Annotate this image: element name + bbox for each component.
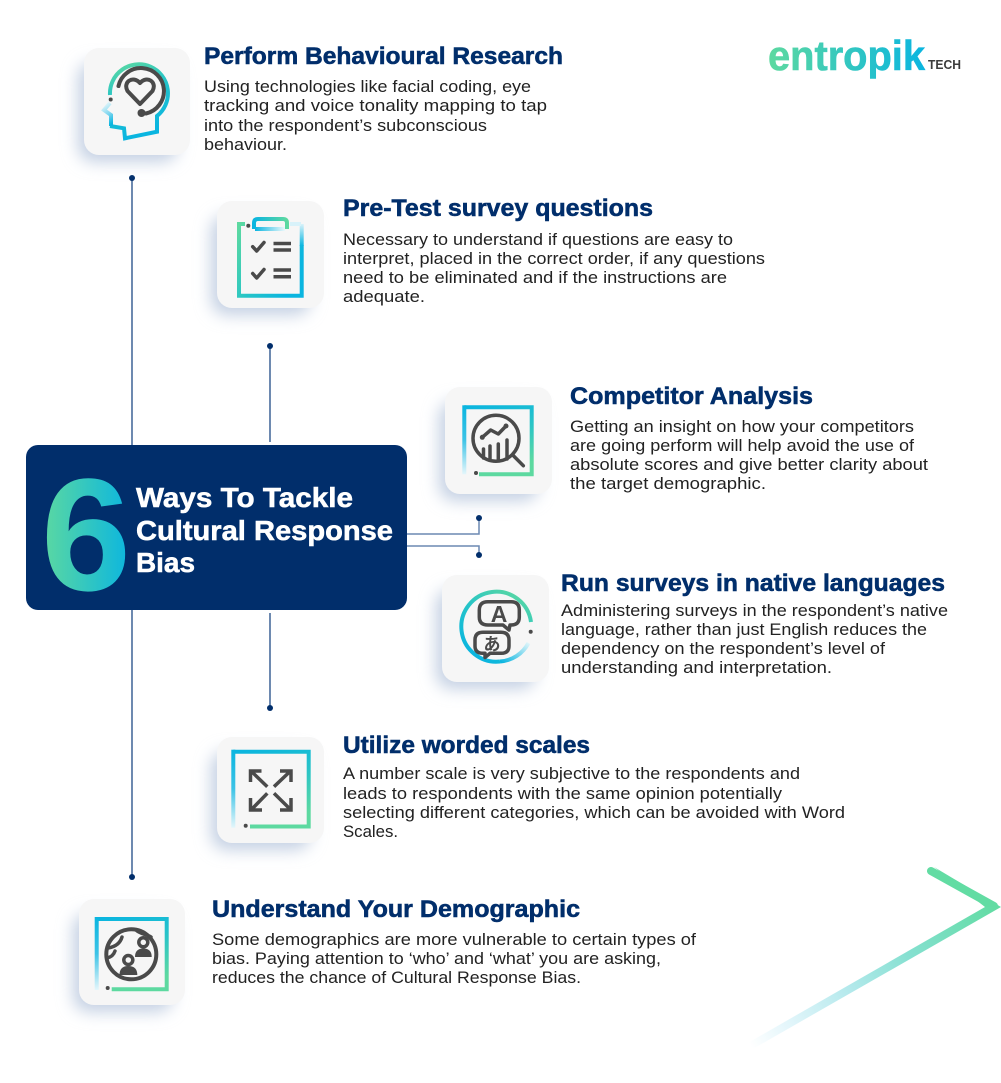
card [211,201,324,315]
icon: head with heart [104,64,168,138]
description: the target demographic. [570,475,766,493]
card [439,387,552,501]
heading: Run surveys in native languages [561,570,945,597]
heading: Understand Your Demographic [212,896,580,923]
panel: understand your demographic [73,896,696,1012]
description: Getting an insight on how your competitors [570,418,914,436]
heading: Perform Behavioural Research [204,43,563,70]
description: bias. Paying attention to ‘who’ and ‘what’ you are asking, [212,950,661,968]
description [570,418,928,493]
panel: run surveys in native languages [436,570,948,689]
description: selecting different categories, which can be avoided with Word [343,804,845,822]
panel: pre-test survey questions [211,195,765,315]
heading: Utilize worded scales [343,732,590,759]
description: reduces the chance of Cultural Response Bias. [212,969,581,987]
description: language, rather than just English reduces the [561,621,927,639]
title: Ways To Tackle [136,482,353,513]
decorative chevron arrow [746,867,1001,1050]
card [211,737,324,850]
panel: utilize worded scales [211,732,845,850]
icon: language speech bubbles [461,592,533,662]
heading: Pre-Test survey questions [343,195,653,222]
description: A number scale is very subjective to the respondents and [343,765,800,783]
description: leads to respondents with the same opinion potentially [343,785,783,803]
description: into the respondent’s subconscious [204,117,487,135]
description: Scales. [343,823,398,841]
description [204,78,547,154]
panel: perform behavioural research [78,43,563,162]
description: are going perform will help avoid the use of [570,437,914,455]
description: Some demographics are more vulnerable to certain types of [212,931,696,949]
title [136,482,393,578]
description: behaviour. [204,136,287,154]
icon: expanding arrows [231,750,309,828]
description: tracking and voice tonality mapping to tap [204,97,547,115]
description: adequate. [343,288,425,306]
logo: entropik tech: entropik [768,32,926,79]
description: understanding and interpretation. [561,659,832,677]
connector lines [129,175,482,880]
description: absolute scores and give better clarity about [570,456,928,474]
description [343,765,845,841]
heading: Competitor Analysis [570,383,813,410]
logo: entropik tech: TECH [928,57,961,72]
panel: competitor analysis [439,383,928,501]
description: Administering surveys in the respondent’s native [561,602,948,620]
title: Cultural Response [136,515,393,546]
card [78,48,190,162]
panel: title banner [26,445,407,624]
description [343,231,765,306]
description: Using technologies like facial coding, eye [204,78,531,96]
icon: language speech bubbles: A [491,601,507,627]
icon: clipboard checklist [239,219,304,296]
description: Necessary to understand if questions are easy to [343,231,733,249]
icon: globe with people [95,917,167,990]
description [212,931,696,987]
icon: magnifier over chart [462,405,532,475]
description: need to be eliminated and if the instructions are [343,269,727,287]
title: Bias [136,547,195,578]
description: interpret, placed in the correct order, if any questions [343,250,765,268]
card [73,899,185,1012]
description: dependency on the respondent’s level of [561,640,885,658]
card [436,575,549,689]
big number six: 6 [41,445,131,624]
description [561,602,948,677]
icon: language speech bubbles: あ [484,635,500,654]
